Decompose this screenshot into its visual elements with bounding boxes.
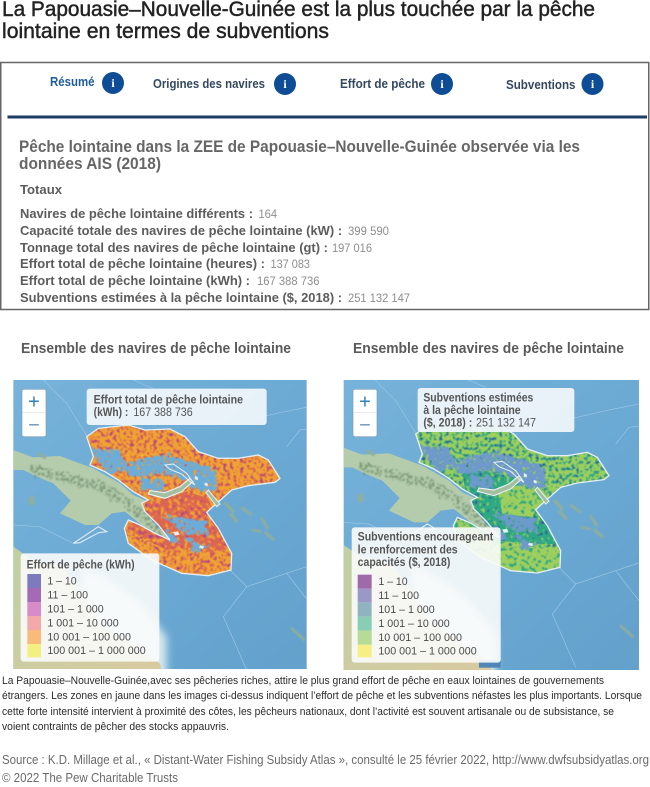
legend: subsidies: 1 001 – 10 000 xyxy=(378,618,450,630)
callout: estimated subsidies: Subventions estimées xyxy=(423,390,534,404)
tab: Origines des navires xyxy=(153,73,296,95)
legend: subsidies: 100 001 – 1 000 000 xyxy=(378,646,477,658)
callout: total effort xyxy=(87,389,267,425)
zoom control: − xyxy=(359,414,371,436)
explanatory paragraph: voient contraints de pêcher des stocks appauvris. xyxy=(2,721,229,733)
tab: Résumé: Résumé xyxy=(50,74,94,89)
zoom control: + xyxy=(28,392,40,414)
legend: fishing effort xyxy=(21,553,159,662)
tab: Résumé: i xyxy=(111,76,115,90)
legend: fishing effort: 11 – 100 xyxy=(47,589,88,601)
tab: Effort de pêche: Effort de pêche xyxy=(340,76,425,91)
callout: total effort: Effort total de pêche lointaine xyxy=(94,392,243,406)
zoom control xyxy=(22,389,46,437)
legend: fishing effort: 10 001 – 100 000 xyxy=(47,631,131,643)
totals list: 197 016 xyxy=(332,243,372,255)
source and copyright xyxy=(2,753,649,785)
legend: fishing effort: 100 001 – 1 000 000 xyxy=(47,645,146,657)
panel heading xyxy=(19,138,580,173)
totals list: Subventions estimées à la pêche lointaine ($, 2018) : xyxy=(20,291,342,305)
callout: estimated subsidies: 251 132 147 xyxy=(476,416,536,430)
totals list: 167 388 736 xyxy=(257,276,320,288)
totals list: Capacité totale des navires de pêche lointaine (kW) : xyxy=(20,224,342,238)
legend: fishing effort: 1 001 – 10 000 xyxy=(47,617,119,629)
legend: subsidies: 101 – 1 000 xyxy=(378,604,435,616)
legend: fishing effort: Effort de pêche (kWh) xyxy=(27,558,135,572)
totals list: Effort total de pêche lointaine (kWh) : xyxy=(20,274,250,288)
totals list xyxy=(20,207,410,305)
totals list: 251 132 147 xyxy=(348,293,410,305)
source and copyright: © 2022 The Pew Charitable Trusts xyxy=(2,771,178,785)
tab: Effort de pêche: i xyxy=(440,77,444,91)
totals list: Navires de pêche lointaine différents : xyxy=(20,207,253,221)
legend: subsidies: le renforcement des xyxy=(358,542,458,556)
explanatory paragraph: cette forte intensité intervient à proximité des côtes, les pêcheurs nationaux, dont l’activité est souvent artisanale ou de subsistance, se xyxy=(2,706,614,718)
tab: Subventions: i xyxy=(591,77,595,91)
legend: subsidies: Subventions encourageant xyxy=(358,530,493,544)
explanatory paragraph: La Papouasie–Nouvelle-Guinée,avec ses pêcheries riches, attire le plus grand effort de pêche en eaux lointaines de gouvernements xyxy=(2,675,604,687)
totals list: Effort total de pêche lointaine (heures) : xyxy=(20,257,265,271)
fishing effort heat layer xyxy=(88,426,279,575)
tab: Origines des navires: i xyxy=(283,77,287,91)
callout: total effort: 167 388 736 xyxy=(133,405,193,419)
totals list: Tonnage total des navires de pêche lointaine (gt) : xyxy=(20,241,328,255)
totals list: 399 590 xyxy=(348,226,389,238)
tab: Effort de pêche xyxy=(340,73,453,95)
legend: subsidies: 10 001 – 100 000 xyxy=(378,632,462,644)
panel heading: Pêche lointaine dans la ZEE de Papouasie–Nouvelle-Guinée observée via les xyxy=(19,138,580,156)
tab bar xyxy=(50,72,604,95)
panel heading: données AIS (2018) xyxy=(19,155,161,173)
zoom control xyxy=(353,389,377,437)
legend: subsidies: 1 – 10 xyxy=(378,576,408,588)
callout: total effort: (kWh) : xyxy=(94,405,128,419)
callout: estimated subsidies xyxy=(418,388,574,432)
tab: Résumé xyxy=(50,72,124,94)
callout: estimated subsidies: ($, 2018) : xyxy=(423,416,472,430)
right map heading: Ensemble des navires de pêche lointaine xyxy=(353,340,624,357)
subsidies heat layer xyxy=(416,432,608,572)
map: estimated subsidies xyxy=(344,380,639,670)
map: fishing effort xyxy=(13,380,307,669)
legend: fishing effort: 1 – 10 xyxy=(47,575,77,587)
legend: subsidies: capacités ($, 2018) xyxy=(358,555,450,569)
legend: subsidies: 11 – 100 xyxy=(378,590,419,602)
tab: Origines des navires: Origines des navires xyxy=(153,76,265,91)
tab: Subventions xyxy=(506,73,604,95)
title xyxy=(2,0,595,43)
legend: fishing effort: 101 – 1 000 xyxy=(47,603,104,615)
subheading: Totaux: Totaux xyxy=(20,183,62,197)
zoom control: − xyxy=(28,414,40,436)
tab: Subventions: Subventions xyxy=(506,77,576,92)
panel: data summary frame xyxy=(1,62,649,310)
totals list: 164 xyxy=(258,209,278,221)
legend: subsidies xyxy=(352,527,501,668)
totals list: 137 083 xyxy=(270,259,310,271)
left map heading: Ensemble des navires de pêche lointaine xyxy=(21,340,291,357)
zoom control: + xyxy=(359,392,371,414)
callout: estimated subsidies: à la pêche lointaine xyxy=(423,403,521,417)
explanatory paragraph xyxy=(2,675,642,733)
title: lointaine en termes de subventions xyxy=(2,19,329,43)
